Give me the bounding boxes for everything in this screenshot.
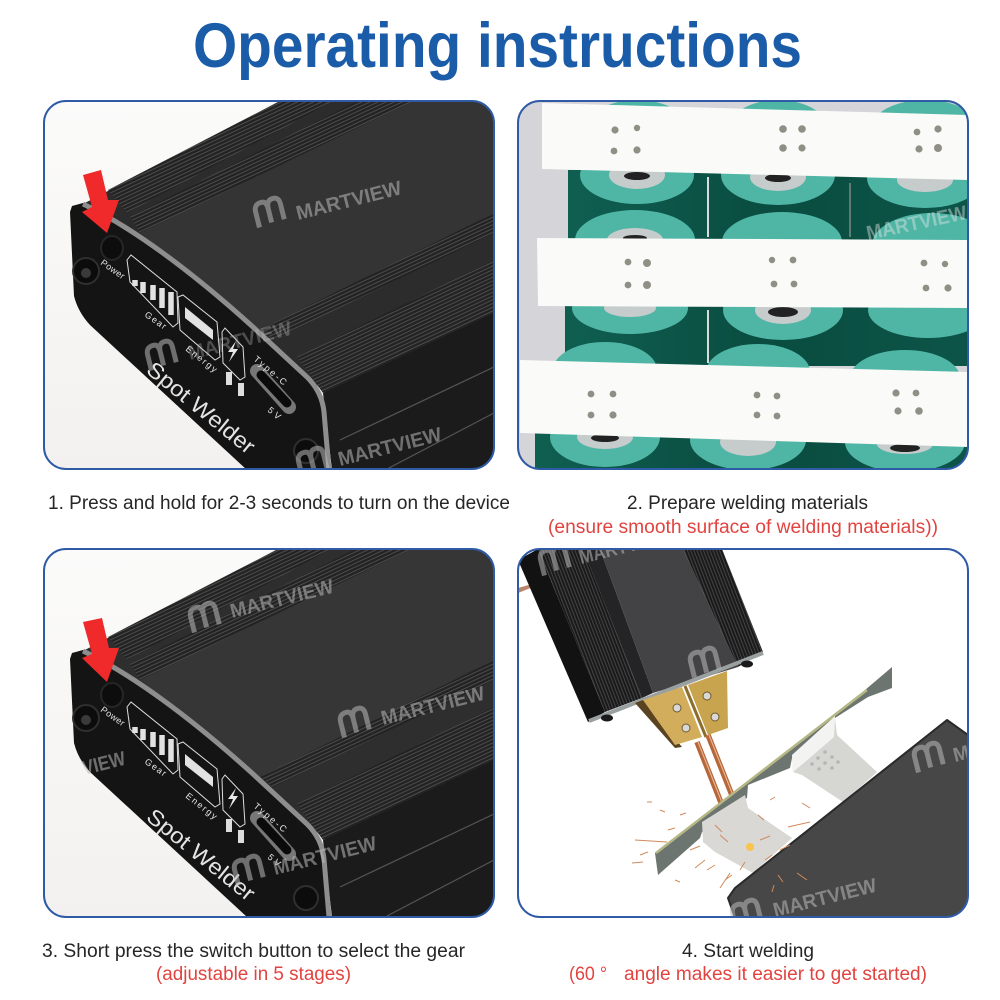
device body: Type-C bbox=[252, 354, 289, 388]
nickel strip 1 bbox=[542, 103, 968, 180]
upper metal tab bbox=[792, 716, 877, 802]
gold electrode holder bbox=[635, 671, 728, 748]
device body bbox=[70, 548, 494, 917]
caption: step 4: 4. Start welding bbox=[682, 941, 814, 962]
device body: Power bbox=[99, 704, 127, 728]
watermark: M bbox=[951, 742, 972, 767]
device body: 5V bbox=[266, 405, 283, 422]
circuit strip bbox=[655, 667, 892, 875]
caption note: step 4: angle makes it easier to get started) bbox=[624, 964, 927, 985]
watermark: MARTVIEW bbox=[771, 875, 879, 922]
watermark: MARTVIEW bbox=[379, 683, 487, 730]
arrow: switch button bbox=[82, 618, 119, 682]
device body: Spot Welder bbox=[142, 356, 260, 459]
caption: step 1: 1. Press and hold for 2-3 seconds to turn on the device bbox=[48, 493, 510, 514]
panel: step 2 welding materials bbox=[518, 100, 992, 472]
panel border: step 3 bbox=[44, 549, 494, 917]
title: Operating instructions bbox=[193, 11, 802, 81]
battery pack bbox=[728, 720, 968, 918]
caption note: step 3: (adjustable in 5 stages) bbox=[156, 964, 351, 985]
watermark: MARTVIEW bbox=[294, 177, 404, 225]
watermark: MARTVIEW bbox=[336, 424, 444, 471]
caption note: step 2: (ensure smooth surface of welding materials)) bbox=[548, 517, 938, 538]
device body: Gear bbox=[143, 756, 168, 778]
device body: Energy bbox=[184, 344, 219, 375]
device body: Spot Welder bbox=[142, 803, 260, 906]
watermark bbox=[145, 177, 444, 478]
device body bbox=[70, 101, 494, 470]
watermark: VIEW bbox=[80, 748, 128, 780]
panel border: step 2 bbox=[518, 101, 968, 469]
caption: step 2: 2. Prepare welding materials bbox=[627, 493, 868, 514]
lower metal tab bbox=[702, 795, 792, 873]
watermark bbox=[538, 533, 972, 930]
caption note: step 4: (60 ° bbox=[569, 964, 607, 985]
nickel strip 2 bbox=[537, 238, 968, 308]
panel: step 3 device photo bbox=[44, 548, 494, 917]
caption: step 3: 3. Short press the switch button to select the gear bbox=[42, 941, 466, 962]
arrow: power button bbox=[82, 170, 119, 233]
device body: Power bbox=[99, 257, 127, 281]
watermark: MARTVIEW bbox=[228, 576, 336, 623]
watermark: MARTVIEW bbox=[271, 833, 379, 880]
panel: step 4 welding bbox=[518, 533, 972, 930]
nickel strip 3 bbox=[520, 360, 968, 447]
watermark bbox=[80, 576, 487, 886]
weld dots bbox=[588, 125, 952, 419]
weld glow bbox=[746, 843, 754, 851]
hand corner bbox=[519, 585, 530, 592]
panel border: step 1 bbox=[44, 101, 494, 469]
device body: Type-C bbox=[252, 801, 289, 835]
device body: Gear bbox=[143, 309, 168, 331]
panel: step 1 device photo bbox=[44, 101, 494, 478]
batteries bbox=[535, 100, 992, 472]
watermark: MARTVIEW bbox=[864, 202, 969, 245]
copper electrodes bbox=[694, 734, 734, 804]
device body: Energy bbox=[184, 791, 219, 822]
sparks bbox=[632, 797, 810, 892]
panel border: step 4 bbox=[518, 549, 968, 917]
welding pen body bbox=[518, 549, 763, 722]
device body: 5V bbox=[266, 852, 283, 869]
watermark: MARTVIEW bbox=[186, 318, 294, 365]
watermark: MARTV bbox=[577, 533, 641, 569]
